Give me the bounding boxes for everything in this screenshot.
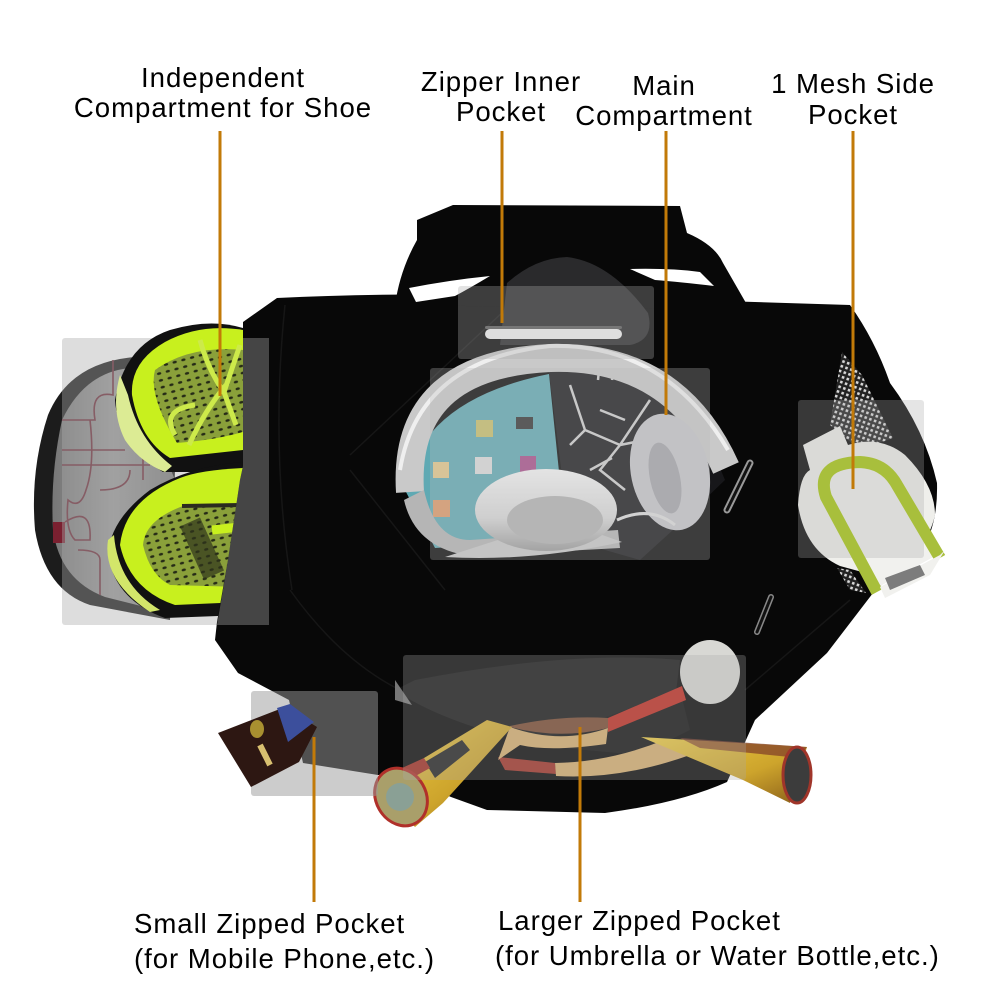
mesh side pocket [798,352,945,598]
icon: headphones [410,358,726,492]
flap part of shoe panel [217,338,269,625]
label: mesh side pocket: Pocket [808,99,898,130]
label: main compartment: Main [632,70,696,101]
shoe compartment lining [34,357,175,620]
label: independent compartment: Compartment for Shoe [74,92,372,123]
label: small zipped pocket: Small Zipped Pocket [134,908,405,939]
zipper inner pocket panel [458,286,654,359]
label: larger zipped pocket: Larger Zipped Pocket [498,905,781,936]
label: independent compartment: Independent [141,62,305,93]
bag folds [279,305,850,690]
main compartment panel [430,368,710,560]
icon: tablet [405,374,566,548]
label: main compartment: Compartment [575,100,753,131]
inner pocket lining [500,257,650,345]
bag body [215,294,937,813]
larger pocket panel [403,655,746,780]
label: mesh side pocket: 1 Mesh Side [771,68,935,99]
main compartment contents [400,346,728,560]
label: zipper inner pocket: Zipper Inner [421,66,581,97]
icon: top shoe [115,323,243,472]
icon: zipper pulls [727,463,771,632]
bag illustration [34,205,945,835]
shoe compartment panel [62,338,269,625]
icon: candy bar [218,704,317,787]
label: small zipped pocket: (for Mobile Phone,etc.) [134,943,435,974]
icon: bottom shoe [107,462,243,618]
icon: marble phone case [549,366,725,560]
label: larger zipped pocket: (for Umbrella or Water Bottle,etc.) [495,940,940,971]
larger pocket contents [395,640,740,755]
icon: table tennis paddles [364,686,811,835]
label: zipper inner pocket: Pocket [456,96,546,127]
icon: bag handle [395,205,750,310]
small pocket [218,691,378,796]
pointer lines [220,131,853,902]
